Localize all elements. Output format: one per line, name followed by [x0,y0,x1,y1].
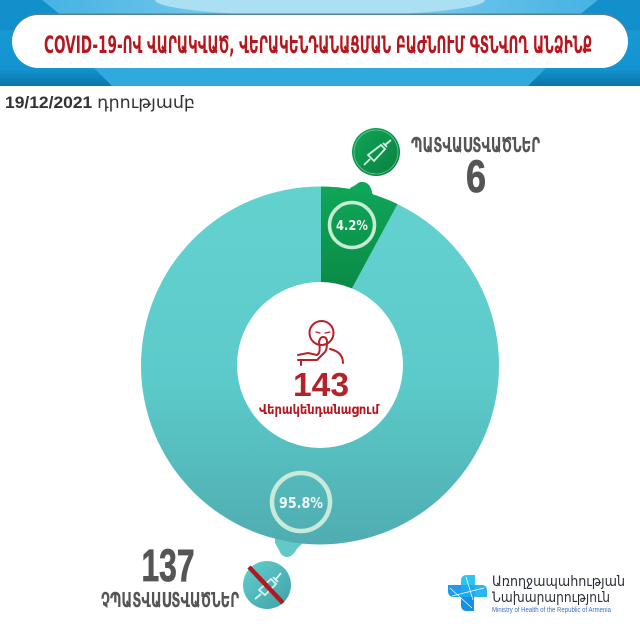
center circle [237,282,403,448]
icon: ministry logo [448,575,487,611]
vaccinated label: ՊԱՏՎԱՍՏՎԱԾՆԵՐ [411,133,540,157]
pointer: vaccinated [350,182,376,198]
ministry name: Առողջապահության [492,574,625,590]
pointer: not vaccinated [275,535,303,557]
ring label 4.2% [330,202,374,248]
segment: not vaccinated 95.8% [141,186,499,544]
ring label 95.8% [272,473,330,531]
total label: Վերակենդանացում [259,403,380,418]
ring label 4.2%: 4.2% [336,218,368,234]
ministry name: Նախարարություն [492,590,610,606]
total number: 143 [293,366,349,403]
icon: crossed syringe [243,561,291,609]
donut chart [141,182,499,557]
icon: syringe green [352,128,400,176]
header banner [0,0,640,86]
segment: vaccinated 4.2% [321,186,398,290]
title pill [12,15,628,68]
ring label 95.8%: 95.8% [279,494,323,512]
not vaccinated number: 137 [142,540,194,591]
icon: patient with oxygen mask [298,321,343,365]
vaccinated number: 6 [466,151,486,202]
ministry name: Ministry of Health of the Republic of Armenia [492,607,611,614]
not vaccinated label: ՉՊԱՏՎԱՍՏՎԱԾՆԵՐ [101,588,239,612]
date: 19/12/2021 դրությամբ [5,93,195,112]
ministry name [492,574,625,614]
